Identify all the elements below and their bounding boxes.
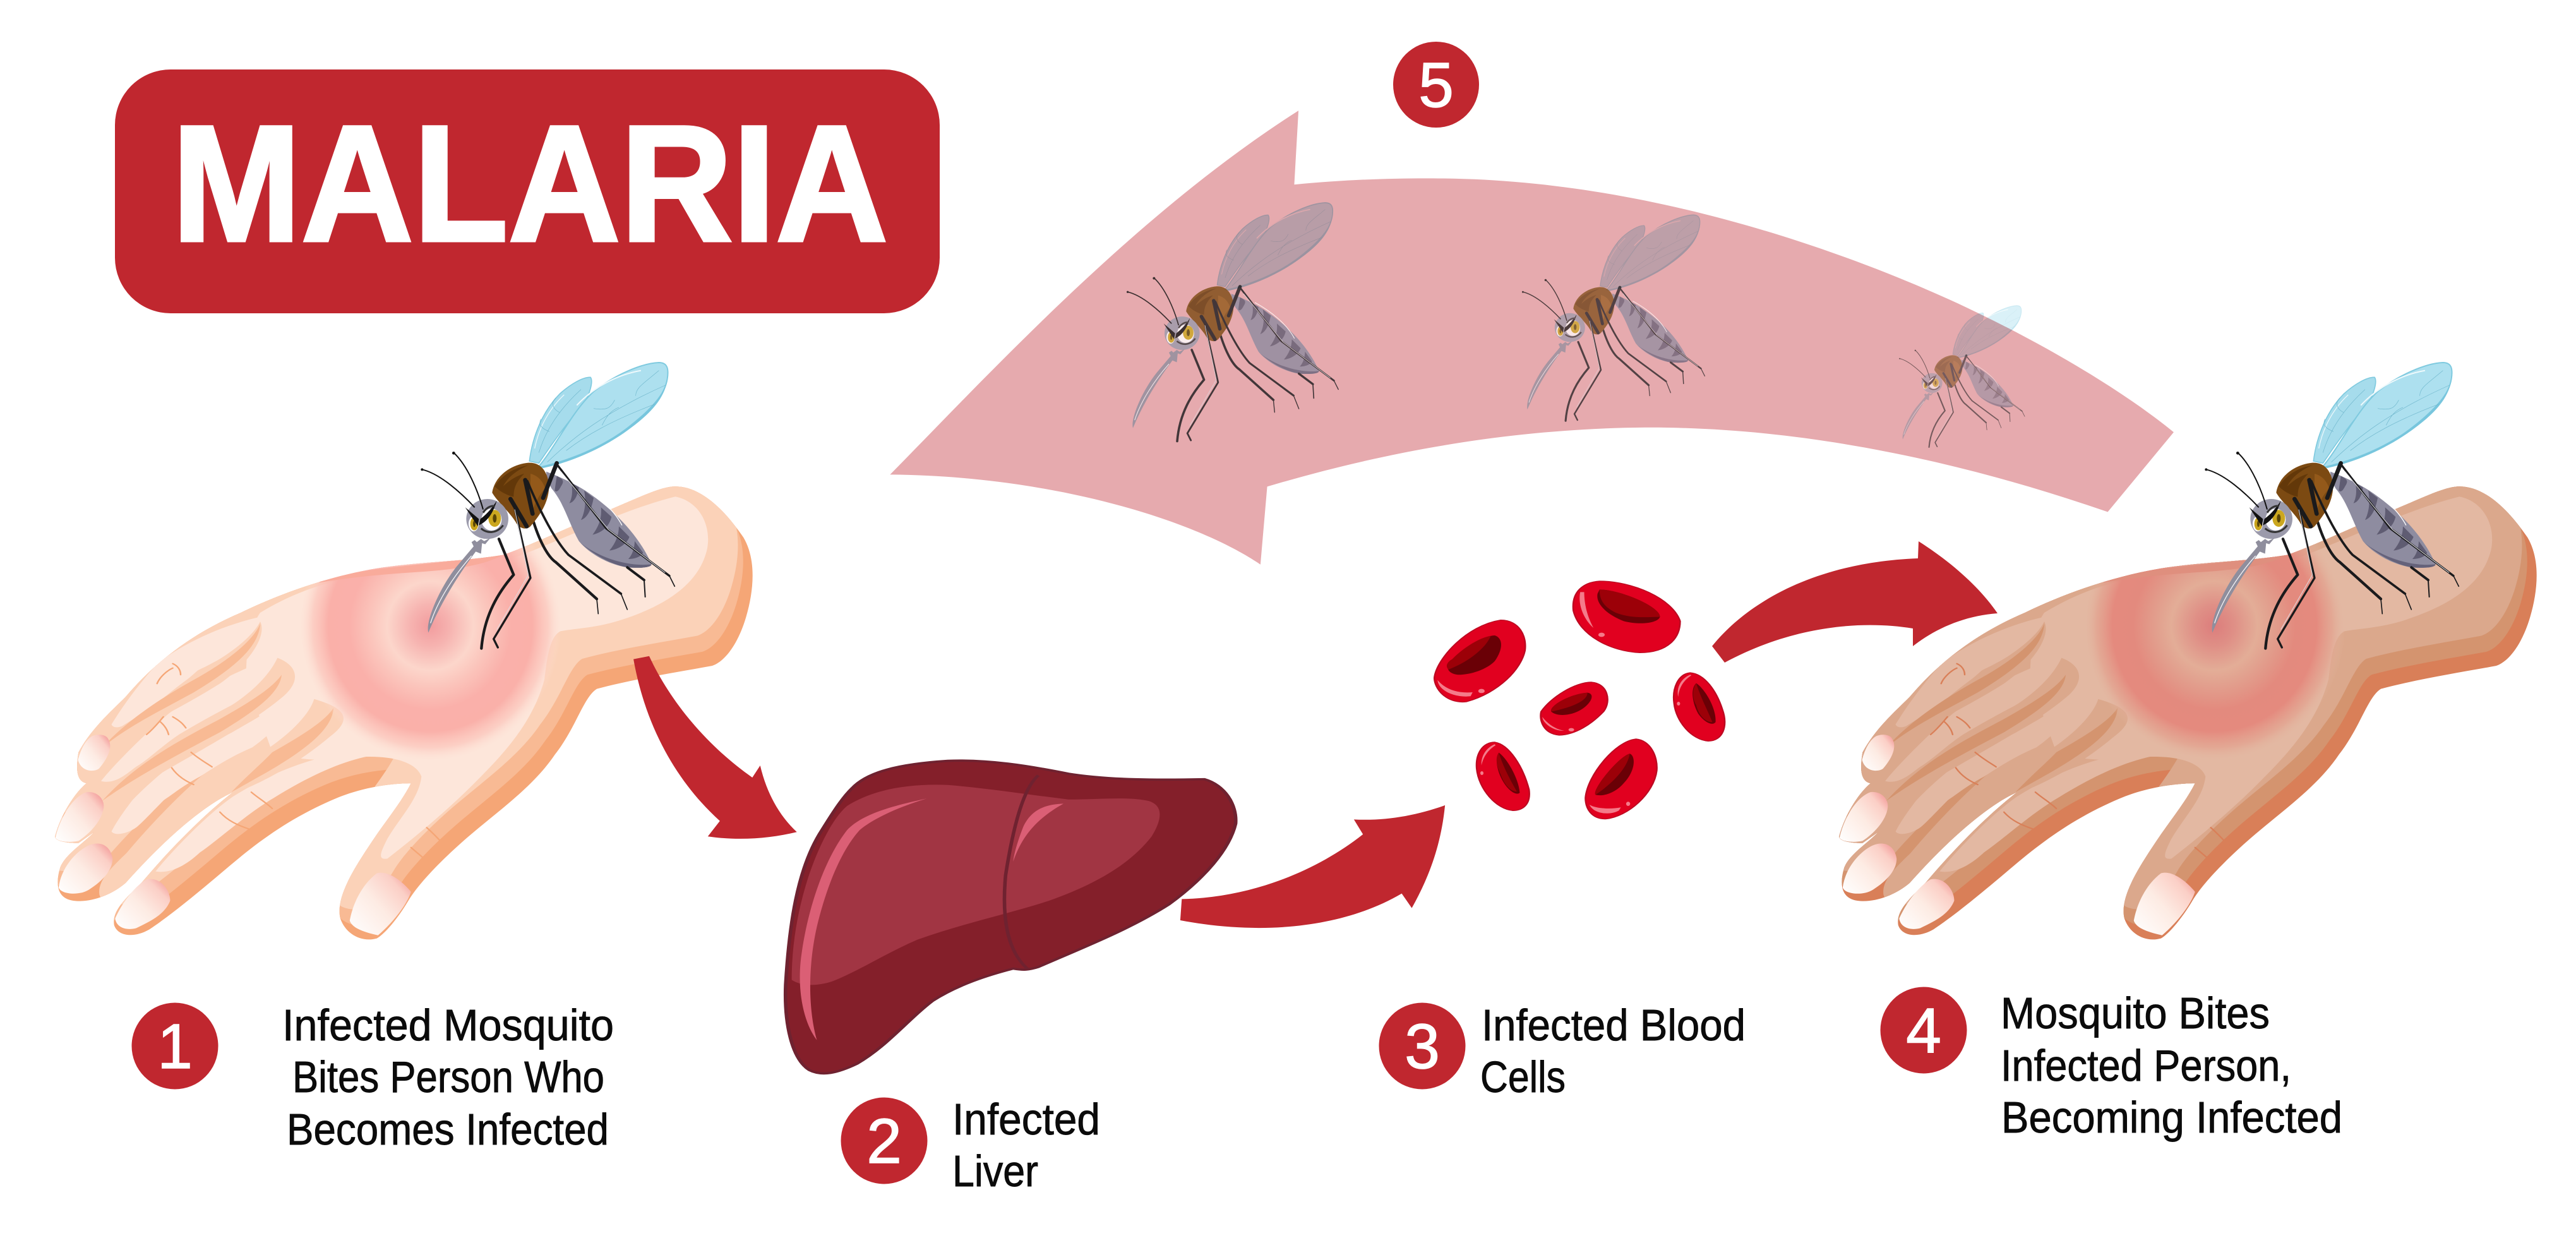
cell: centre [1541,682,1608,735]
step 4: number and label [1881,987,2342,1142]
arrow: blood cells to hand 2 [1712,541,1998,663]
arrow: liver to blood cells [1180,805,1445,928]
fading mosquito, large [1127,203,1338,442]
step 3: number and label: 3 [1405,1011,1440,1082]
step 1: number and label: Becomes Infected [287,1105,609,1154]
cell: right [1674,673,1725,741]
step 2: number and label: Infected [952,1095,1100,1144]
step 4: number and label: 4 [1906,995,1941,1066]
step number 5 [1393,42,1479,128]
pink arrow: step 5 return path [890,111,2174,565]
infected red blood cells [1434,581,1725,819]
cell: bottom centre [1585,739,1657,819]
step 2: number and label: Liver [952,1146,1038,1196]
step 3: number and label: Infected Blood [1482,1001,1746,1050]
step 1: number and label: 1 [157,1011,193,1082]
mosquito biting hand 1 [421,363,674,649]
step 2: number and label: 2 [866,1106,902,1177]
hand 2: darker skin with bite [1824,456,2537,939]
fading mosquito, small [1899,306,2025,447]
step 4: number and label: Infected Person, [2001,1041,2291,1090]
step 3: number and label: Cells [1480,1052,1566,1102]
hand 1: light skin with bite [40,456,753,939]
step 4: number and label: Mosquito Bites [2001,989,2270,1038]
title banner: MALARIA: MALARIA [172,91,888,276]
step number 5: 5 [1418,50,1454,121]
mosquito biting hand 2 [2205,363,2459,649]
liver [786,760,1236,1073]
cell: bottom left [1477,742,1530,810]
step 2: number and label [841,1095,1100,1196]
step 1: number and label [131,1001,614,1154]
arrow: hand to liver [633,656,797,839]
step 4: number and label: Becoming Infected [2001,1093,2342,1142]
step 3: number and label [1379,1001,1746,1102]
cell: top [1573,581,1680,652]
step 1: number and label: Infected Mosquito [282,1001,614,1050]
cell: left [1434,620,1525,702]
step 1: number and label: Bites Person Who [292,1052,604,1102]
fading mosquito, medium [1522,215,1704,421]
